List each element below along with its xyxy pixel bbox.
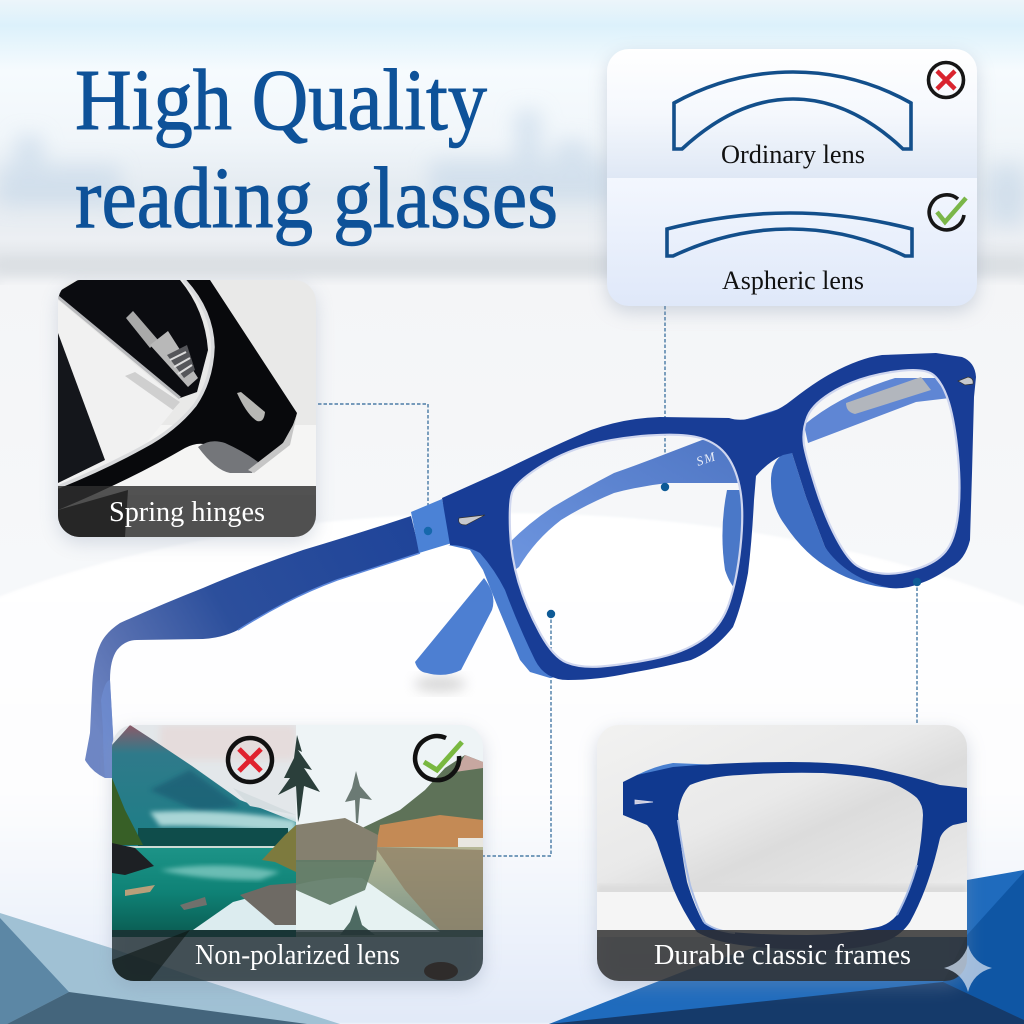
caption: Durable classic frames [654,940,911,971]
photo: polarized half [296,725,483,937]
photo: black frame [58,280,297,510]
label: aspheric lens: Aspheric lens [722,266,864,295]
photo: frame front [623,762,967,950]
nose pad [771,452,890,588]
background: blurred city sky [0,0,1024,710]
icon: aspheric lens profile [667,213,912,256]
lens engraving: SM [694,448,718,469]
lens glass edges [510,370,960,667]
illustration: far temple tip shadow [414,676,466,692]
panel: durable classic frames [597,725,967,987]
icon: green check [929,195,966,230]
icon: red cross [928,62,964,98]
icon: sparkle star [944,945,992,992]
caption bar [112,930,483,981]
icon: red cross [228,738,272,782]
callout anchor dots [424,483,921,618]
photo: rivet [237,392,265,421]
caption bar [597,930,967,981]
panel: non-polarized lens [112,725,483,987]
photo: pines [278,735,375,935]
photo: hinge underside [198,441,258,473]
caption: Spring hinges [109,497,265,528]
far temple arm [415,378,950,675]
background: bottom-left polygons [0,913,340,1024]
light-blue frame edge [448,545,562,678]
front frame rim [442,353,976,680]
icon: ordinary lens profile [674,72,911,149]
panel: spring hinges [58,280,316,543]
near temple arm [85,516,420,778]
caption bar [58,486,316,537]
callout connector lines [318,306,917,856]
background: bottom-right polygons [549,870,1024,1024]
rivet [635,800,653,804]
grey hinge seen through right lens [846,377,931,414]
hinge block [411,499,452,553]
illustration: blue reading glasses [85,353,976,778]
icon: green check [415,736,462,780]
background: white curved floor [0,513,1024,1024]
photo: non-polarized half [112,725,296,937]
title: reading glasses [75,149,558,246]
panel: lens comparison [607,49,977,312]
rivets [459,377,973,525]
label: ordinary lens: Ordinary lens [721,140,865,169]
photo: spring mechanism [125,311,198,410]
title [75,51,558,246]
title: High Quality [75,51,487,148]
photo: lens area [58,301,176,425]
caption: Non-polarized lens [195,940,400,971]
photo: chrome rim [58,280,213,487]
